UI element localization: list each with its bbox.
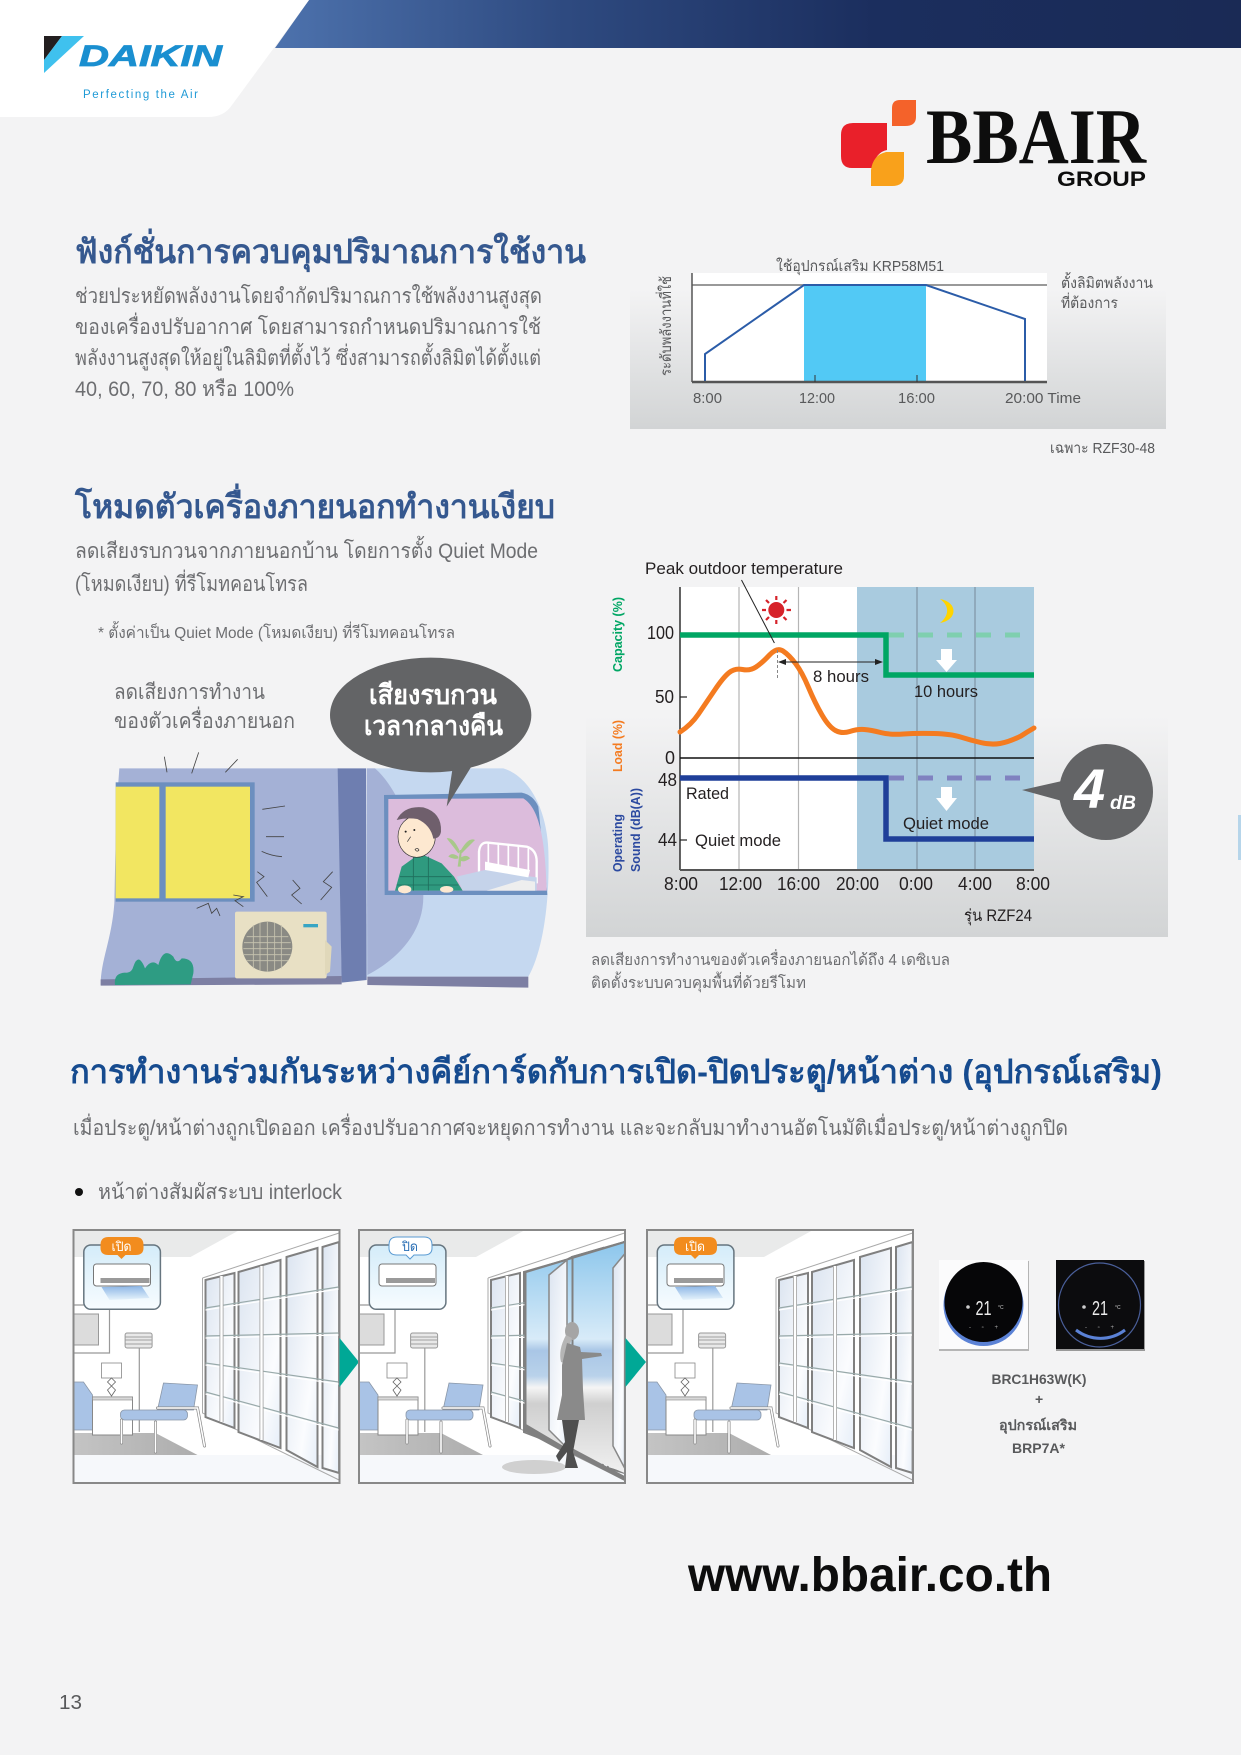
logo: BBAIR Group: GROUP (1057, 168, 1146, 191)
chart: quiet mode capacity, load and sound: 48 (658, 770, 677, 790)
chart: quiet mode capacity, load and sound: 8 hours (813, 668, 869, 686)
icon: white remote controller: °C (998, 1305, 1004, 1311)
heading: demand control: ฟังก์ชั่นการควบคุมปริมาณการใช้งาน (75, 228, 586, 273)
bullet: window contact interlock: หน้าต่างสัมผัสระบบ interlock (98, 1181, 342, 1204)
icon: black remote controller (1056, 1260, 1145, 1351)
right edge tab (1238, 815, 1241, 860)
panel: step 3 AC on again: เปิด (685, 1239, 705, 1254)
panel: step 1 AC on: เปิด (112, 1239, 132, 1254)
text block: controller model: BRP7A* (1012, 1440, 1066, 1456)
icon: moon (940, 599, 954, 623)
chart: quiet mode capacity, load and sound: Peak outdoor temperature (645, 560, 843, 578)
website address: www.bbair.co.th (687, 1549, 1052, 1602)
icon: sun (762, 596, 791, 624)
chart: quiet mode capacity, load and sound: 8:00 (1016, 874, 1050, 894)
chart: quiet mode capacity, load and sound: รุ่น RZF24 (964, 907, 1032, 926)
text block: controller model: BRC1H63W(K) (992, 1371, 1086, 1387)
arrow: 8 hours span (778, 650, 883, 680)
note: model RZF30-48: เฉพาะ RZF30-48 (1050, 440, 1155, 457)
icon: white remote controller: - ▫ + (969, 1325, 998, 1331)
callout: 4 dB reduction: 4 (1073, 757, 1105, 820)
text block: demand control description (75, 284, 542, 401)
chart: quiet mode capacity, load and sound: 50 (655, 687, 674, 707)
callout text: night noise: เสียงรบกวน (369, 680, 498, 710)
chart: quiet mode capacity, load and sound: 10 hours (914, 683, 978, 701)
icon: down arrow sound (936, 787, 957, 811)
chart: quiet mode capacity, load and sound: 8:00 (664, 874, 698, 894)
logo: Daikin: Perfecting the Air (83, 89, 198, 101)
chart: quiet mode capacity, load and sound: Quiet mode (903, 815, 989, 833)
chart: demand control panel: ใช้อุปกรณ์เสริม KRP58M51 (776, 257, 944, 276)
chart: demand control panel: 20:00 Time (1005, 390, 1081, 407)
text block: demand control description: พลังงานสูงสุดให้อยู่ในลิมิตที่ตั้งไว้ ซึ่งสามารถตั้งลิมิตได้ตั้งแต่ (75, 343, 541, 371)
text block: demand control description: ของเครื่องปรับอากาศ โดยสามารถกำหนดปริมาณการใช้ (75, 312, 541, 339)
chart: quiet mode capacity, load and sound: Quiet mode (695, 832, 781, 850)
text block: demand control description: ช่วยประหยัดพลังงานโดยจำกัดปริมาณการใช้พลังงานสูงสุด (75, 284, 542, 309)
text block: interlock description: เมื่อประตู/หน้าต่างถูกเปิดออก เครื่องปรับอากาศจะหยุดการทำงาน และจะกลับมาทำงานอัตโนมัติเมื่อประตู/หน้าต่างถูกปิด (73, 1113, 1068, 1141)
note: quiet mode setting: * ตั้งค่าเป็น Quiet Mode (โหมดเงียบ) ที่รีโมทคอนโทรล (98, 621, 455, 642)
heading: key card and window interlock: การทำงานร่วมกันระหว่างคีย์การ์ดกับการเปิด-ปิดประตู/หน้าต่าง (อุปกรณ์เสริม) (70, 1053, 1162, 1093)
panel: step 3 AC on again (647, 1230, 913, 1483)
text block: controller model (992, 1371, 1086, 1456)
text block: controller model: + (1035, 1391, 1043, 1407)
label: reduce outdoor noise: ลดเสียงการทำงาน (114, 681, 265, 704)
panel: step 2 window open, AC off (359, 1230, 625, 1483)
header navy gradient bar (275, 0, 1241, 48)
text block: controller model: อุปกรณ์เสริม (999, 1417, 1077, 1434)
chart: demand control panel: 16:00 (898, 390, 935, 407)
chart: quiet mode capacity, load and sound: Sound (dB(A)) (628, 788, 643, 872)
chart: quiet mode capacity, load and sound: 0:00 (899, 874, 933, 894)
caption: quiet mode chart: ติดตั้งระบบควบคุมพื้นที่ด้วยรีโมท (591, 971, 806, 993)
text block: quiet mode description: ลดเสียงรบกวนจากภายนอกบ้าน โดยการตั้ง Quiet Mode (75, 536, 538, 563)
chart: demand control panel: ตั้งลิมิตพลังงาน (1061, 272, 1153, 292)
chart: quiet mode capacity, load and sound: Operating (610, 814, 625, 872)
label: reduce outdoor noise (114, 681, 295, 733)
icon: bush (115, 953, 194, 985)
illustration: worried man (395, 807, 537, 893)
illustration: house with outdoor unit and neighbour (101, 658, 549, 988)
panel: step 1 AC on (74, 1230, 340, 1483)
white logo tab (0, 0, 309, 117)
text block: demand control description: 40, 60, 70, 80 หรือ 100% (75, 378, 294, 401)
chart: quiet mode capacity, load and sound: 12:00 (719, 874, 762, 894)
chart: demand control panel (630, 257, 1166, 429)
logo: BBAIR Group (841, 93, 1147, 191)
icon: white remote controller: 21 (976, 1298, 992, 1320)
icon: black remote controller: 21 (1092, 1298, 1108, 1320)
panel: step 2 window open, AC off: ปิด (401, 1239, 418, 1254)
caption: quiet mode chart (591, 949, 950, 993)
icon: black remote controller: - ▫ + (1085, 1325, 1114, 1331)
chart: quiet mode capacity, load and sound: 4:00 (958, 874, 992, 894)
chart: quiet mode capacity, load and sound: 16:00 (777, 874, 820, 894)
chart: quiet mode capacity, load and sound: Load (%) (610, 720, 625, 772)
logo: Daikin: DAIKIN (79, 40, 224, 73)
chart: demand control panel: 12:00 (799, 390, 835, 407)
logo: BBAIR Group: BBAIR (926, 93, 1147, 180)
page number: 13 (59, 1692, 82, 1714)
logo: Daikin (44, 36, 224, 101)
noise lines (164, 752, 333, 916)
text block: quiet mode description (75, 536, 538, 596)
chart: quiet mode capacity, load and sound: 100 (647, 623, 674, 643)
chart: quiet mode capacity, load and sound: 44 (658, 830, 677, 850)
chart: demand control panel: ที่ต้องการ (1061, 292, 1118, 312)
callout: night noise speech bubble (330, 658, 531, 807)
chart: quiet mode capacity, load and sound: Rated (686, 785, 729, 803)
callout text: night noise (364, 680, 503, 741)
heading: quiet mode: โหมดตัวเครื่องภายนอกทำงานเงียบ (74, 483, 555, 525)
illustration: woman at the open window (502, 1322, 602, 1474)
icon: black remote controller: °C (1115, 1305, 1121, 1311)
chart: quiet mode capacity, load and sound (586, 560, 1168, 937)
arrow: peak temperature pointer (742, 580, 774, 643)
callout text: night noise: เวลากลางคืน (364, 711, 503, 741)
arrow: step 2 to 3 (626, 1338, 646, 1387)
callout: 4 dB reduction: dB (1110, 793, 1136, 814)
chart: quiet mode capacity, load and sound: 20:00 (836, 874, 879, 894)
arrow: step 1 to 2 (340, 1338, 359, 1387)
icon: white remote controller (939, 1260, 1029, 1351)
icon: down arrow capacity (936, 649, 957, 672)
callout: 4 dB reduction (1022, 744, 1153, 840)
icon: outdoor AC unit (235, 912, 332, 978)
caption: quiet mode chart: ลดเสียงการทำงานของตัวเครื่องภายนอกได้ถึง 4 เดซิเบล (591, 949, 950, 969)
label: reduce outdoor noise: ของตัวเครื่องภายนอก (114, 706, 295, 733)
chart: quiet mode capacity, load and sound: 0 (665, 748, 675, 768)
text block: quiet mode description: (โหมดเงียบ) ที่รีโมทคอนโทรล (75, 569, 308, 596)
chart: quiet mode capacity, load and sound: Capacity (%) (610, 597, 625, 672)
chart: demand control panel: ระดับพลังงานที่ใช้ (655, 276, 675, 376)
chart: demand control panel: 8:00 (693, 390, 722, 407)
